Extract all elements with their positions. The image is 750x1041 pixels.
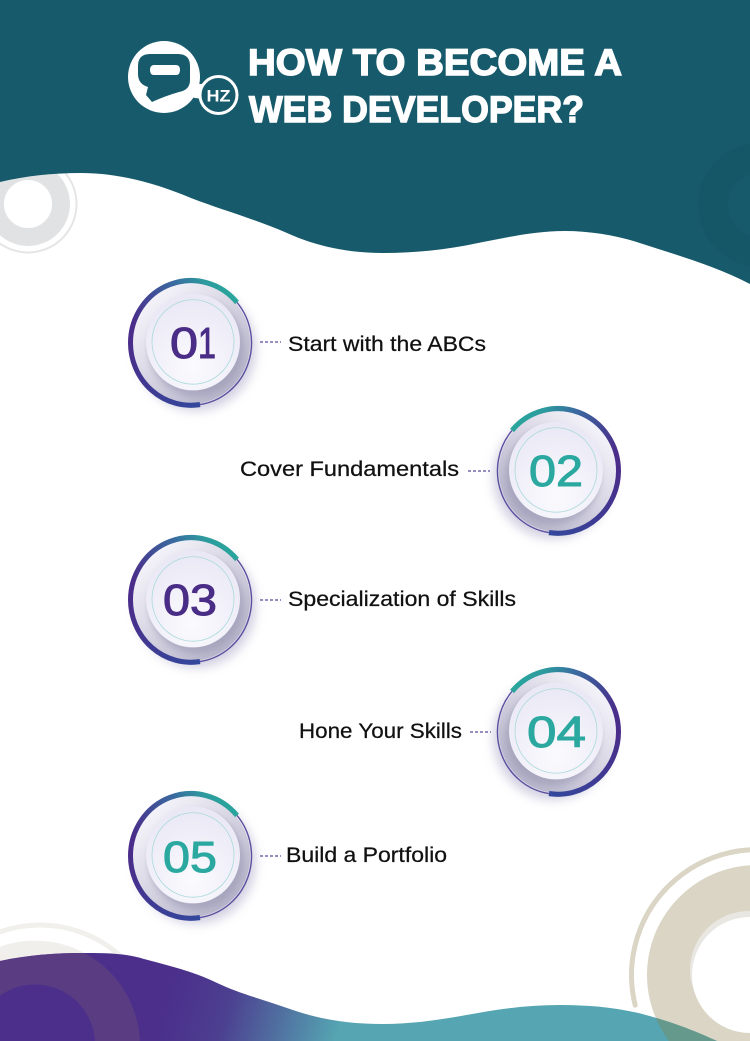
title [248, 42, 622, 130]
decoration: bottom-right beige ring [632, 850, 750, 1041]
decoration: bottom-left beige ring [0, 925, 159, 1041]
logo: 9Hz: HZ [206, 86, 230, 106]
header wave background [0, 0, 750, 284]
step 01 [130, 281, 486, 411]
decoration: top-left grey ring [0, 156, 76, 252]
step 01: 0 [170, 319, 198, 368]
title: HOW TO BECOME A [248, 42, 622, 83]
bottom wave [0, 953, 717, 1041]
step 05: 05 [163, 833, 217, 882]
step 01: Start with the ABCs [288, 333, 486, 356]
step 03 [130, 538, 516, 668]
step 03: Specialization of Skills [288, 588, 516, 611]
step 05: Build a Portfolio [286, 844, 447, 867]
logo: 9Hz [128, 41, 237, 114]
step 01: 1 [198, 319, 216, 368]
decoration: header subtle ring [713, 158, 750, 252]
step 04 [299, 670, 619, 800]
step 03: 03 [163, 576, 217, 625]
step 02: Cover Fundamentals [240, 458, 459, 481]
step 04: 04 [527, 708, 586, 757]
step 05 [130, 794, 447, 924]
step 02 [240, 409, 619, 539]
title: WEB DEVELOPER? [249, 89, 584, 130]
step 02: 02 [529, 447, 583, 496]
step 04: Hone Your Skills [299, 720, 462, 743]
